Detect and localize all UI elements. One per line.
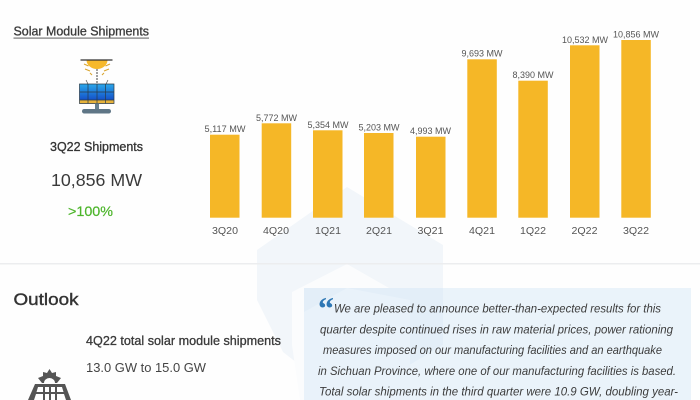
quote text: in Sichuan Province, where one of our manufacturing facilities is based. bbox=[318, 364, 676, 378]
heading: Outlook: Outlook bbox=[14, 290, 79, 309]
bar: 1Q21: 1Q21 bbox=[315, 225, 341, 237]
quote text: quarter despite continued rises in raw material prices, power rationing bbox=[320, 322, 673, 336]
bar: 2Q21: 5,203 MW bbox=[358, 122, 400, 132]
bar: 4Q21 bbox=[462, 48, 503, 237]
bar: 2Q21 bbox=[358, 122, 400, 237]
heading: Solar Module Shipments: Solar Module Shipments bbox=[14, 24, 149, 38]
bar: 4Q20: 4Q20 bbox=[263, 225, 289, 237]
bar: 3Q22: 3Q22 bbox=[623, 225, 649, 237]
bar: 1Q22: 1Q22 bbox=[520, 225, 546, 237]
quote text: measures imposed on our manufacturing facilities and an earthquake bbox=[323, 343, 662, 357]
bar: 2Q21: 2Q21 bbox=[366, 225, 392, 237]
bar: 1Q21 bbox=[308, 120, 349, 237]
KPI value: 10,856 MW: 10,856 MW bbox=[51, 170, 142, 190]
bar: 3Q21: 4,993 MW bbox=[410, 126, 452, 136]
bar: 3Q20: 5,117 MW bbox=[204, 124, 246, 134]
bar: 1Q21: 5,354 MW bbox=[308, 120, 349, 130]
bar: 3Q21: 3Q21 bbox=[418, 225, 444, 237]
panel: management quote bbox=[304, 288, 691, 400]
bar: 4Q21: 4Q21 bbox=[469, 225, 495, 237]
icon: grey solar panel bbox=[28, 369, 71, 400]
bar: 2Q22: 10,532 MW bbox=[562, 35, 608, 45]
quote text bbox=[318, 302, 678, 398]
icon: sun and solar panel bbox=[80, 60, 114, 114]
section divider bbox=[0, 263, 700, 264]
bar: 4Q20 bbox=[256, 113, 298, 237]
outlook value: 13.0 GW to 15.0 GW bbox=[86, 360, 207, 375]
outlook label: 4Q22 total solar module shipments bbox=[86, 334, 281, 348]
bar: 3Q22: 10,856 MW bbox=[613, 30, 659, 40]
bar: 3Q22 bbox=[613, 30, 659, 237]
bar: 2Q22 bbox=[562, 35, 608, 237]
bar: 4Q21: 9,693 MW bbox=[462, 48, 503, 58]
bar: 3Q21 bbox=[410, 126, 452, 237]
icon: quote mark: “ bbox=[318, 290, 334, 326]
bar: 1Q22: 8,390 MW bbox=[512, 70, 554, 80]
KPI label: 3Q22 Shipments: 3Q22 Shipments bbox=[50, 140, 143, 154]
bar: 3Q20 bbox=[204, 124, 246, 237]
quote text: We are pleased to announce better-than-expected results for this bbox=[334, 302, 661, 316]
bar: 1Q22 bbox=[512, 70, 554, 237]
bar: 4Q20: 5,772 MW bbox=[256, 113, 298, 123]
bar: 2Q22: 2Q22 bbox=[572, 225, 598, 237]
bar chart: shipments by quarter bbox=[204, 30, 659, 237]
KPI change: >100%: >100% bbox=[68, 203, 113, 219]
bar: 3Q20: 3Q20 bbox=[212, 225, 238, 237]
watermark: pale hexagon bbox=[257, 187, 443, 400]
quote text: Total solar shipments in the third quarter were 10.9 GW, doubling year- bbox=[319, 384, 678, 398]
